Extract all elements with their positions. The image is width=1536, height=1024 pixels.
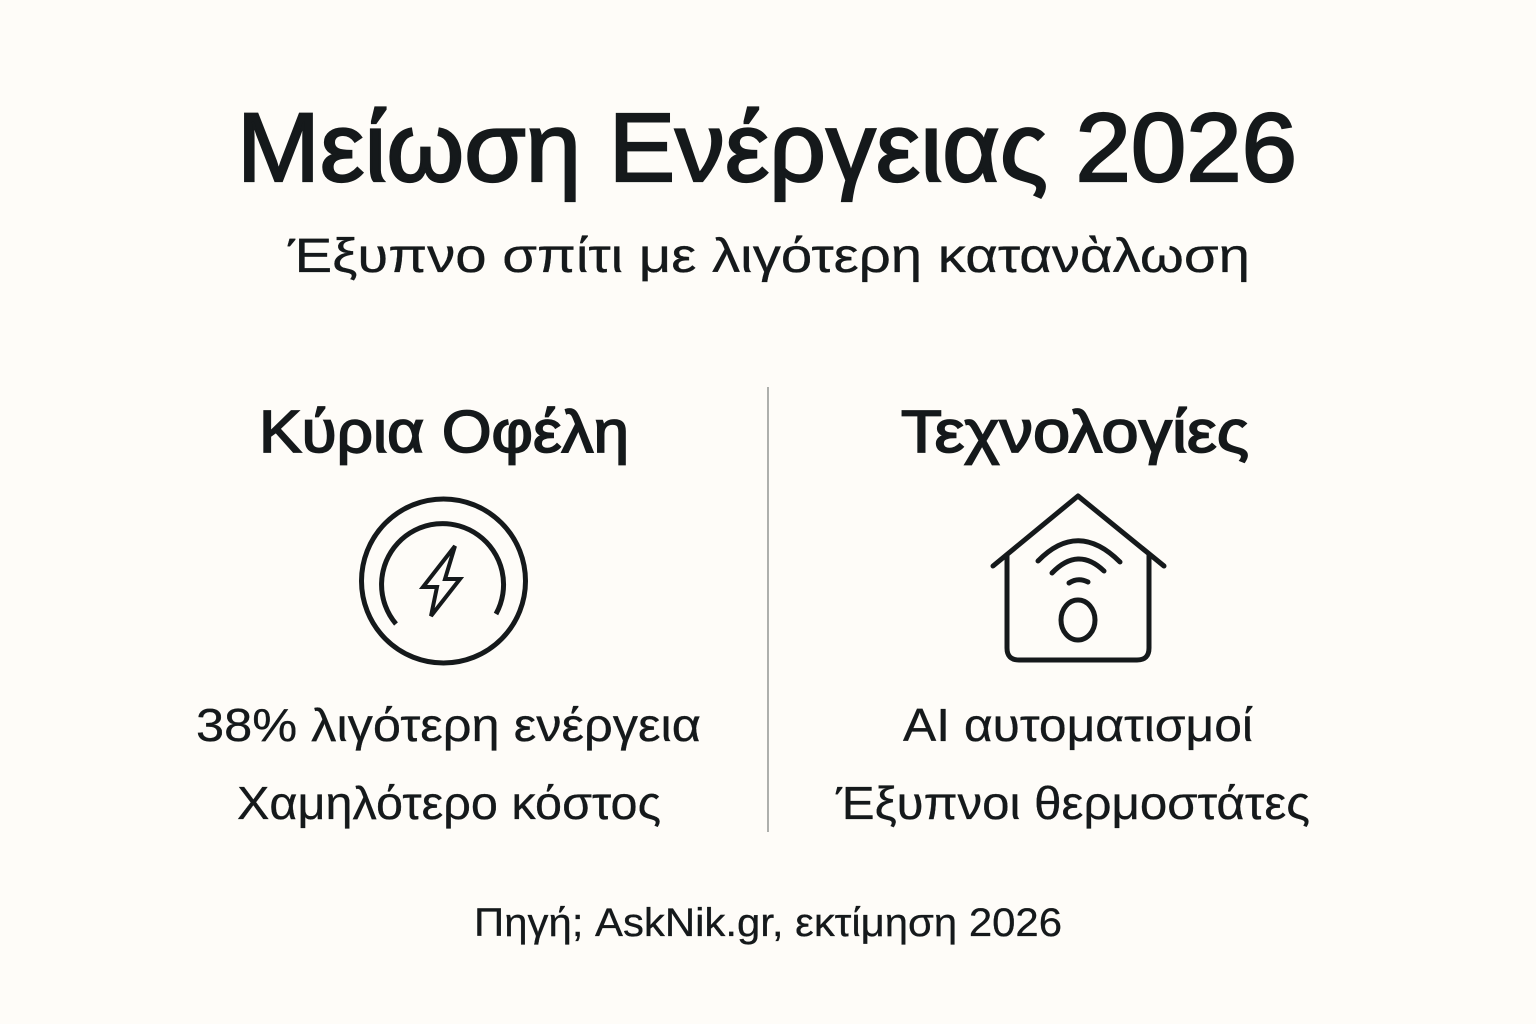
- heading: main benefits: Κύρια Οφέλη: [259, 399, 629, 465]
- benefit: energy savings: 38% λιγότερη ενέργεια: [196, 699, 701, 751]
- vertical divider: [767, 387, 769, 832]
- panel: main benefits: [196, 399, 701, 829]
- icon: energy gauge with lightning bolt: [362, 499, 526, 663]
- title: Μείωση Ενέργειας 2026: [237, 93, 1297, 202]
- heading: technologies: Τεχνολογίες: [901, 399, 1249, 465]
- panel: technologies: [835, 399, 1310, 829]
- technology: AI automation: AI αυτοματισμοί: [903, 699, 1253, 751]
- icon: smart home with wifi: [993, 496, 1164, 660]
- subtitle: Έξυπνο σπίτι με λιγότερη κατανὰλωση: [287, 230, 1250, 283]
- technology: smart thermostats: Έξυπνοι θερμοστάτες: [835, 777, 1310, 829]
- source footer: Πηγή; AskNik.gr, εκτίμηση 2026: [474, 901, 1062, 945]
- benefit: lower cost: Χαμηλότερο κόστος: [237, 777, 661, 829]
